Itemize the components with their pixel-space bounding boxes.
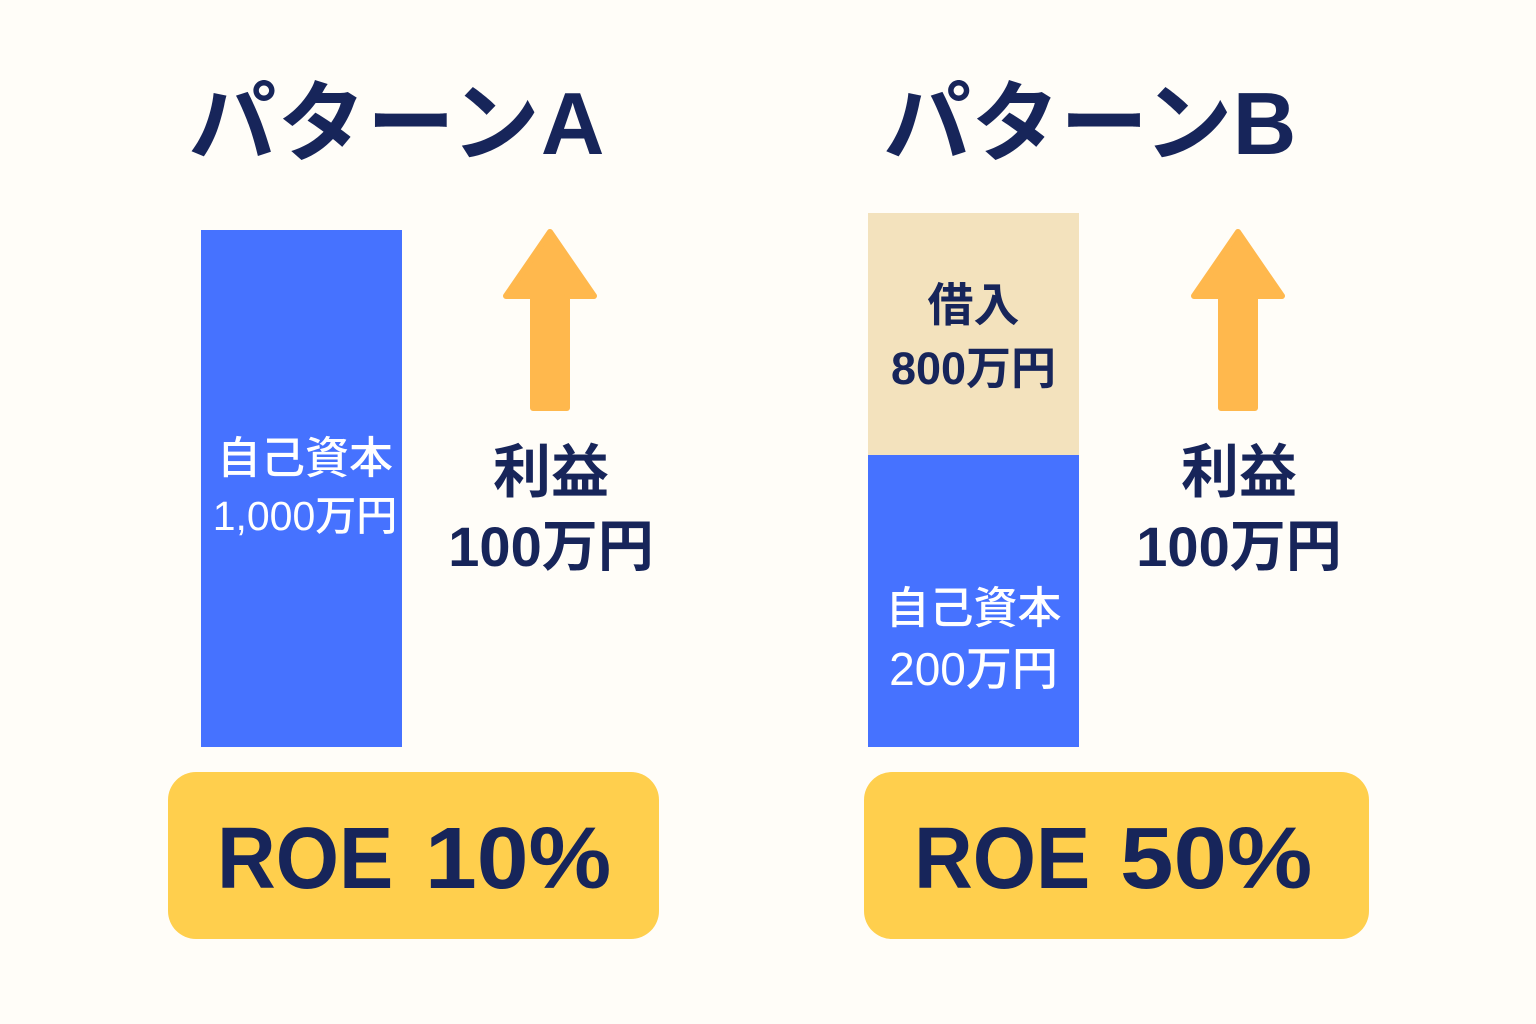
callout text: ROE B — [914, 810, 1312, 907]
label: profit A: 利益 — [493, 440, 609, 505]
bar: equity B — [868, 455, 1079, 747]
label: loan B — [891, 279, 1056, 394]
label: profit B — [1136, 440, 1342, 578]
label: profit B: 100万円 — [1136, 515, 1342, 578]
callout text: ROE A — [217, 810, 611, 907]
callout text: ROE A: ROE — [217, 810, 393, 907]
callout: ROE B — [864, 772, 1369, 939]
label: equity B: 200万円 — [889, 643, 1058, 695]
label: profit B: 利益 — [1181, 440, 1297, 505]
callout text: ROE B: 50% — [1120, 810, 1312, 907]
icon: profit arrow A — [503, 229, 597, 411]
label: equity A: 1,000万円 — [213, 493, 397, 539]
label: loan B: 借入 — [928, 279, 1020, 331]
label: equity B: 自己資本 — [886, 584, 1062, 633]
label: equity A — [213, 434, 397, 539]
callout text: ROE B: ROE — [914, 810, 1090, 907]
label: equity B — [886, 584, 1062, 695]
label: equity A: 自己資本 — [217, 434, 393, 483]
callout text: ROE A: 10% — [425, 810, 611, 907]
icon: profit arrow B — [1191, 229, 1285, 411]
bar: equity A — [201, 230, 402, 747]
heading: pattern B: パターンB — [883, 74, 1297, 173]
label: loan B: 800万円 — [891, 343, 1056, 394]
label: profit A — [448, 440, 654, 578]
bar: loan B — [868, 213, 1079, 455]
heading: pattern A: パターンA — [188, 74, 606, 173]
callout: ROE A — [168, 772, 659, 939]
label: profit A: 100万円 — [448, 515, 654, 578]
